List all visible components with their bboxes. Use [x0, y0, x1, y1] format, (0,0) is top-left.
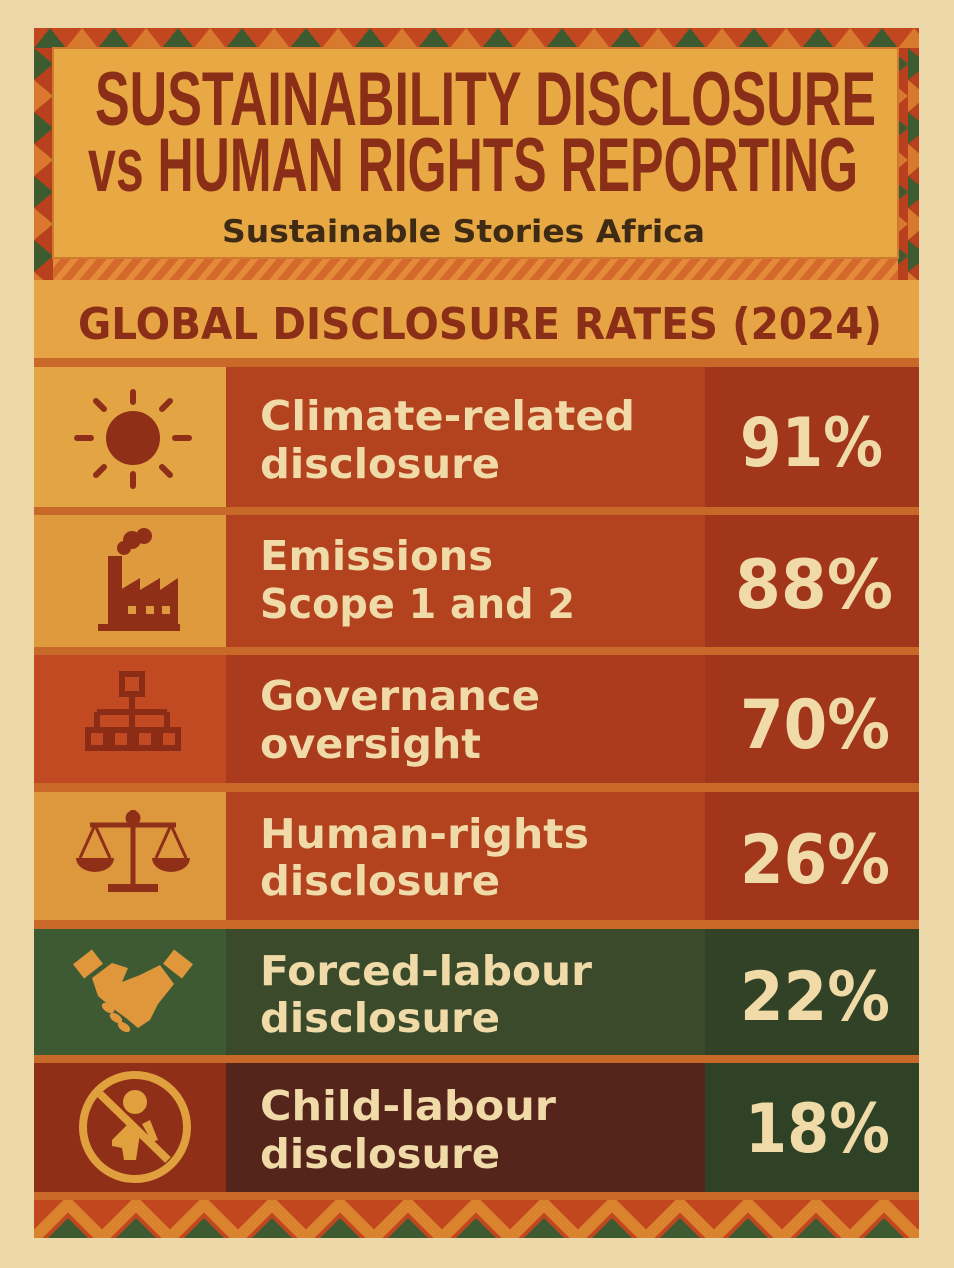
row: emissions [34, 515, 919, 647]
label: Forced-labour [260, 947, 593, 995]
label: Emissions [260, 532, 493, 580]
row: governance [34, 655, 919, 783]
title box [53, 48, 898, 258]
row: forced labour [34, 929, 919, 1055]
row: climate [34, 367, 919, 507]
row: child labour [34, 1063, 919, 1192]
value: 88% [735, 546, 893, 625]
icon: factory [98, 528, 180, 631]
label: Child-labour [260, 1082, 557, 1130]
icon: scales [76, 810, 190, 892]
icon: sun [77, 392, 189, 486]
icon: org chart [88, 674, 178, 748]
bottom zigzag border [34, 1200, 919, 1238]
title [88, 57, 876, 208]
label: disclosure [260, 1130, 500, 1178]
value: 18% [745, 1090, 890, 1169]
icon: handshake [73, 950, 193, 1034]
label: Human-rights [260, 810, 589, 858]
row: human rights [34, 792, 919, 920]
section header: GLOBAL DISCLOSURE RATES (2024) [78, 299, 882, 350]
value: 22% [740, 958, 890, 1037]
section header [34, 280, 919, 358]
value: 91% [740, 404, 883, 483]
label: Governance [260, 672, 540, 720]
value: 70% [740, 686, 890, 765]
label: oversight [260, 720, 481, 768]
label: disclosure [260, 994, 500, 1042]
subtitle: Sustainable Stories Africa [222, 214, 705, 250]
icon: no child [83, 1075, 187, 1179]
label: Climate-related [260, 392, 635, 440]
value: 26% [740, 821, 890, 900]
label: disclosure [260, 857, 500, 905]
label: disclosure [260, 440, 500, 488]
label: Scope 1 and 2 [260, 580, 575, 628]
